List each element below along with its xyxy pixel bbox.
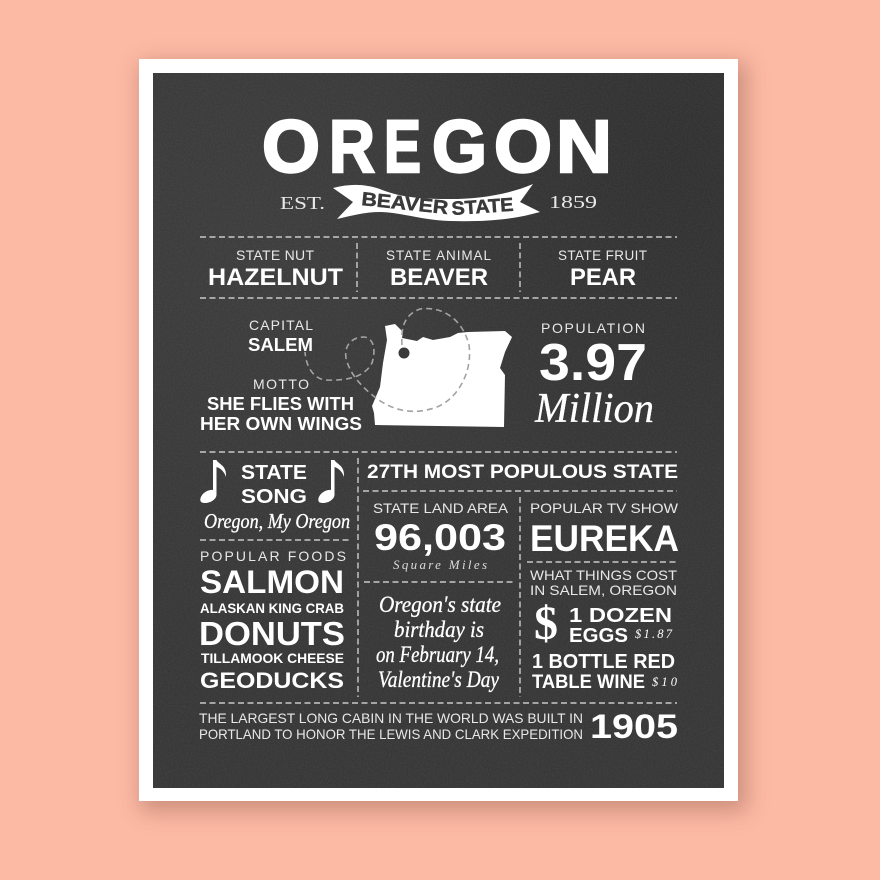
panel: popular foods: TILLAMOOK CHEESE bbox=[201, 650, 344, 666]
panel: log cabin fact bbox=[199, 708, 678, 746]
panel: log cabin fact: 1905 bbox=[590, 708, 678, 746]
chalkboard background bbox=[153, 73, 724, 788]
panel: state animal: BEAVER bbox=[390, 264, 488, 291]
panel: log cabin fact: THE LARGEST LONG CABIN IN THE WORLD WAS BUILT IN bbox=[199, 710, 583, 726]
map of Oregon with route bbox=[305, 309, 512, 427]
founding year: 1859 bbox=[549, 192, 597, 212]
panel: popular tv show: EUREKA bbox=[530, 518, 679, 559]
title bbox=[262, 105, 612, 188]
panel: population: POPULATION bbox=[541, 320, 645, 336]
title: N bbox=[556, 105, 612, 188]
panel: state song bbox=[200, 460, 350, 533]
panel: state land area: Square Miles bbox=[393, 557, 487, 572]
icon: dollar sign: $ bbox=[534, 597, 558, 650]
state silhouette bbox=[372, 324, 512, 427]
panel: popular foods: GEODUCKS bbox=[200, 668, 344, 693]
banner ribbon bbox=[333, 184, 540, 221]
panel: state nut: STATE NUT bbox=[236, 247, 314, 263]
panel: what things cost: EGGS bbox=[569, 624, 628, 647]
panel: state song: SONG bbox=[241, 485, 307, 508]
established and nickname banner bbox=[280, 184, 597, 221]
panel: state song: STATE bbox=[241, 461, 307, 484]
title: R bbox=[329, 105, 375, 188]
panel: motto: HER OWN WINGS bbox=[200, 413, 362, 434]
panel: motto: MOTTO bbox=[253, 376, 309, 392]
panel: what things cost: $1.87 bbox=[635, 627, 673, 641]
panel: what things cost: 1 DOZEN bbox=[569, 604, 672, 627]
panel: state land area: 96,003 bbox=[374, 517, 506, 558]
panel: what things cost: $10 bbox=[652, 675, 678, 689]
panel: capital: CAPITAL bbox=[249, 317, 313, 333]
panel: capital bbox=[248, 317, 313, 355]
panel: most populous rank: 27TH MOST POPULOUS STATE bbox=[367, 461, 678, 483]
title: O bbox=[494, 105, 552, 188]
panel: popular foods: ALASKAN KING CRAB bbox=[200, 600, 344, 616]
panel: birthday note bbox=[376, 592, 501, 692]
panel: what things cost: TABLE WINE bbox=[532, 672, 645, 693]
title: E bbox=[384, 105, 421, 188]
panel: birthday note: birthday is bbox=[394, 617, 484, 642]
panel: state fruit: PEAR bbox=[570, 264, 636, 291]
panel: population: Million bbox=[534, 386, 654, 432]
panel: state fruit bbox=[558, 248, 647, 291]
panel: state nut bbox=[208, 247, 343, 291]
panel: popular tv show: POPULAR TV SHOW bbox=[530, 500, 679, 516]
banner text bbox=[360, 189, 514, 220]
panel: state land area: STATE LAND AREA bbox=[373, 500, 509, 516]
poster white frame bbox=[139, 59, 738, 801]
panel: state land area bbox=[373, 500, 509, 572]
panel: popular foods: DONUTS bbox=[199, 616, 345, 653]
panel: population bbox=[534, 320, 654, 432]
panel: motto bbox=[200, 376, 362, 434]
panel: population: 3.97 bbox=[539, 334, 647, 392]
panel: what things cost: WHAT THINGS COST bbox=[530, 567, 677, 583]
banner text: BEAVER bbox=[360, 189, 449, 219]
icon: music note right bbox=[318, 460, 344, 503]
panel: birthday note: Valentine's Day bbox=[378, 667, 500, 692]
panel: popular foods: POPULAR FOODS bbox=[200, 548, 346, 564]
panel: what things cost: IN SALEM, OREGON bbox=[530, 582, 677, 598]
capital marker bbox=[398, 348, 410, 358]
banner text: STATE bbox=[451, 195, 514, 220]
panel: what things cost bbox=[530, 567, 678, 693]
title: G bbox=[432, 105, 487, 188]
panel: state animal bbox=[386, 248, 491, 291]
est label: EST. bbox=[280, 193, 325, 213]
panel: state fruit: STATE FRUIT bbox=[558, 248, 647, 263]
panel: state nut: HAZELNUT bbox=[208, 264, 343, 291]
panel: popular tv show bbox=[530, 500, 679, 559]
title: O bbox=[262, 105, 320, 188]
panel: motto: SHE FLIES WITH bbox=[207, 393, 354, 414]
dashed route bbox=[305, 309, 470, 411]
panel: birthday note: Oregon's state bbox=[379, 592, 501, 617]
icon: music note left bbox=[200, 460, 226, 503]
panel: log cabin fact: PORTLAND TO HONOR THE LEWIS AND CLARK EXPEDITION bbox=[199, 726, 583, 742]
panel: what things cost: 1 BOTTLE RED bbox=[532, 650, 675, 673]
panel: popular foods: SALMON bbox=[200, 564, 344, 600]
panel: popular foods bbox=[199, 548, 346, 693]
panel: state song: Oregon, My Oregon bbox=[204, 509, 350, 533]
panel: birthday note: on February 14, bbox=[376, 642, 499, 667]
panel: capital: SALEM bbox=[248, 334, 313, 355]
panel: state animal: STATE ANIMAL bbox=[386, 248, 491, 263]
